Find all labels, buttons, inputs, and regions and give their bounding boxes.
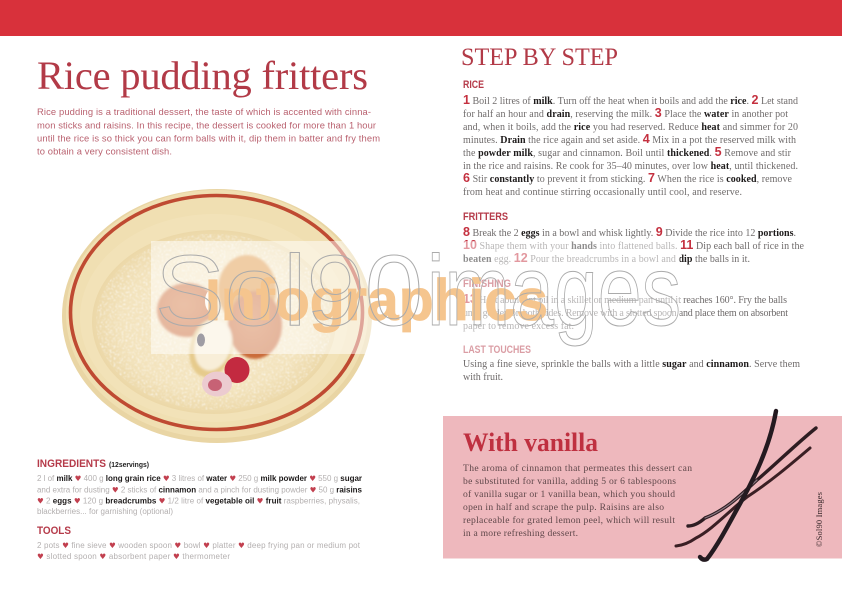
fritters steps <box>463 225 805 265</box>
ingredients list <box>37 474 363 516</box>
rice steps: minutes. Drain the rice again and set aside. 4 Mix in a pot the reserved milk with <box>463 132 796 146</box>
last touches text: Using a fine sieve, sprinkle the balls with a little sugar and cinnamon. Serve them <box>463 359 800 370</box>
finishing steps: until golden on both sides. Remove with a slotted spoon and place them on absorbent <box>463 308 788 319</box>
panel: with vanilla <box>443 411 842 560</box>
ingredients block <box>37 458 363 516</box>
watermark: Infographics: Infographics <box>205 268 548 333</box>
intro paragraph: mon sticks and raisins. In this recipe, the dessert is cooked for more than 1 hour <box>37 120 376 130</box>
ingredients list: blackberries... for garnishing (optional) <box>37 507 173 516</box>
fritters steps: beaten egg. 12 Pour the breadcrumbs in a bowl and dip the balls in it. <box>463 251 750 265</box>
rice steps: and, when it boils, add the rice you had reserved. Reduce heat and simmer for 20 <box>463 122 798 133</box>
ingredients list: ♥ 2 eggs ♥ 120 g breadcrumbs ♥ 1/2 litre of vegetable oil ♥ fruit raspberries, physalis, <box>37 496 360 506</box>
tools list: ♥ slotted spoon ♥ absorbent paper ♥ thermometer <box>37 552 230 561</box>
rice steps: 1 Boil 2 litres of milk. Turn off the heat when it boils and add the rice. 2 Let stand <box>463 93 798 107</box>
tools list: 2 pots ♥ fine sieve ♥ wooden spoon ♥ bowl ♥ platter ♥ deep frying pan or medium pot <box>37 541 361 550</box>
panel text: replaceable for grated lemon peel, which will result <box>463 515 675 526</box>
panel text: in a more refreshing dessert. <box>463 528 578 539</box>
rice steps: in the rice and raisins. Re cook for 35–40 minutes, over low heat, until thickened. <box>463 161 798 172</box>
rice steps: 6 Stir constantly to prevent it from sticking. 7 When the rice is cooked, remove <box>463 171 793 185</box>
last touches text <box>463 359 800 383</box>
fritters steps: 8 Break the 2 eggs in a bowl and whisk lightly. 9 Divide the rice into 12 portions. <box>463 225 796 239</box>
panel background <box>443 416 842 558</box>
watermark: Sol90images: Sol90 <box>155 235 423 347</box>
photo: plate of rice fritters <box>62 189 372 443</box>
fritters heading: FRITTERS <box>463 211 508 223</box>
watermark: Sol90images <box>155 235 681 347</box>
top red band <box>0 0 842 36</box>
intro paragraph: until the rice is so thick you can form balls with it, dip them in batter and fry them <box>37 132 380 144</box>
intro paragraph: Rice pudding is a traditional dessert, the taste of which is accented with cinna- <box>37 106 371 117</box>
watermark: Sol90images: images <box>427 235 681 347</box>
tools list <box>37 541 361 561</box>
last touches heading: LAST TOUCHES <box>463 344 531 356</box>
fritters steps: 10 Shape them with your hands into flattened balls. 11 Dip each ball of rice in the <box>463 238 805 252</box>
rice steps: the powder milk, sugar and cinnamon. Boil until thickened. 5 Remove and stir <box>463 145 792 159</box>
watermark panel <box>151 241 680 354</box>
section: fritters <box>463 211 805 265</box>
rice steps: from heat and continue stirring occasionally until cool, and reserve. <box>463 187 742 198</box>
finishing steps: 13 Heat abundant oil in a skillet or medium pan until it reaches 160°. Fry the balls <box>463 292 787 306</box>
ingredients heading: INGREDIENTS <box>37 458 106 470</box>
ingredients list: and extra for dusting ♥ 2 sticks of cinnamon and a pinch for dusting powder ♥ 50 g raisins <box>37 486 363 494</box>
panel heading: With vanilla <box>463 428 598 457</box>
panel text <box>463 463 692 539</box>
intro paragraph: to obtain a very consistent dish. <box>37 146 172 156</box>
credit: ©Sol90 Images <box>814 492 824 547</box>
panel text: The aroma of cinnamon that permeates this dessert can <box>463 463 692 474</box>
ingredients list: 2 l of milk ♥ 400 g long grain rice ♥ 3 litres of water ♥ 250 g milk powder ♥ 550 g sugar <box>37 474 362 483</box>
rice heading: RICE <box>463 79 484 91</box>
finishing steps <box>463 292 788 332</box>
servings note: (12servings) <box>109 460 149 469</box>
finishing steps: paper to remove excess fat. <box>463 321 574 332</box>
step by step heading: STEP BY STEP <box>461 44 618 71</box>
rice steps: for half an hour and drain, reserving the milk. 3 Place the water in another pot <box>463 106 788 120</box>
panel text: of vanilla sugar or 1 vanilla bean, which you should <box>463 489 675 500</box>
rice steps <box>463 93 798 198</box>
panel text: open in half and scrape the pulp. Raisins are also <box>463 502 664 513</box>
section: last touches <box>463 344 800 383</box>
last touches text: with fruit. <box>463 372 503 383</box>
icon: vanilla beans <box>676 411 816 560</box>
section: finishing <box>463 278 788 332</box>
tools block <box>37 525 361 561</box>
intro paragraph <box>37 106 380 156</box>
panel text: be substituted for vanilla, adding 5 or 6 tablespoons <box>463 476 676 487</box>
tools heading: TOOLS <box>37 525 71 537</box>
finishing heading: FINISHING <box>463 278 511 290</box>
title: Rice pudding fritters <box>37 53 368 98</box>
section: rice <box>463 79 798 198</box>
